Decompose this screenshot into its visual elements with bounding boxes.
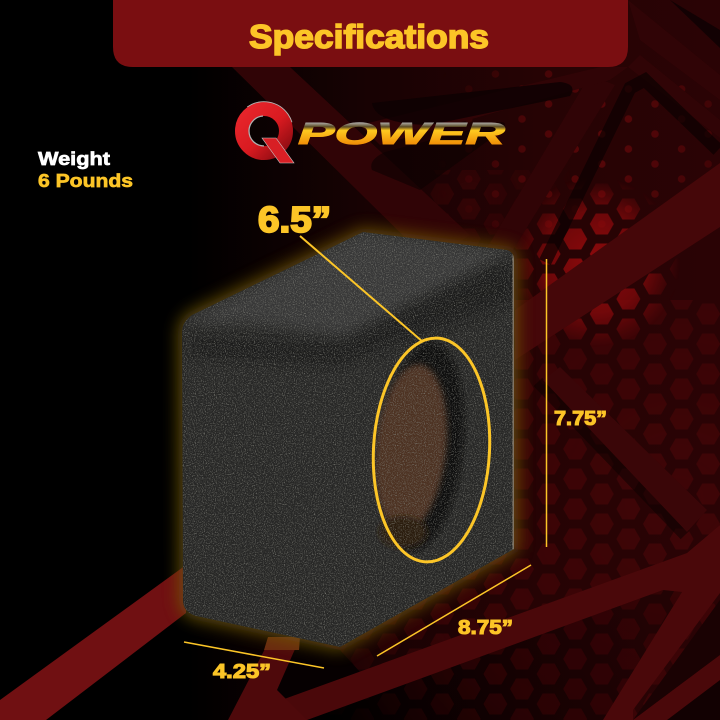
dimension: height: 7.75” <box>554 408 607 430</box>
red strut <box>0 565 186 720</box>
lower cavity <box>307 587 682 720</box>
lower band <box>232 525 720 720</box>
black tip <box>276 640 360 698</box>
title banner <box>113 0 628 67</box>
weight text <box>38 148 133 191</box>
logo: Q Power: POWER <box>298 116 506 151</box>
title: Specifications <box>249 18 489 55</box>
speaker box <box>182 232 514 647</box>
dimension: hole diameter <box>258 199 495 565</box>
box top face <box>185 232 514 336</box>
speaker hole <box>375 340 466 554</box>
weight text: Weight <box>38 148 110 169</box>
dimension: depth <box>377 565 531 656</box>
speaker box glow <box>182 232 514 647</box>
dimension: width: 4.25” <box>213 661 271 683</box>
dimension: hole diameter: 6.5” <box>258 199 331 240</box>
weight text: 6 Pounds <box>38 170 133 191</box>
dimension: depth: 8.75” <box>458 617 513 639</box>
logo: Q Power <box>223 90 506 172</box>
dimension: width <box>184 642 324 683</box>
